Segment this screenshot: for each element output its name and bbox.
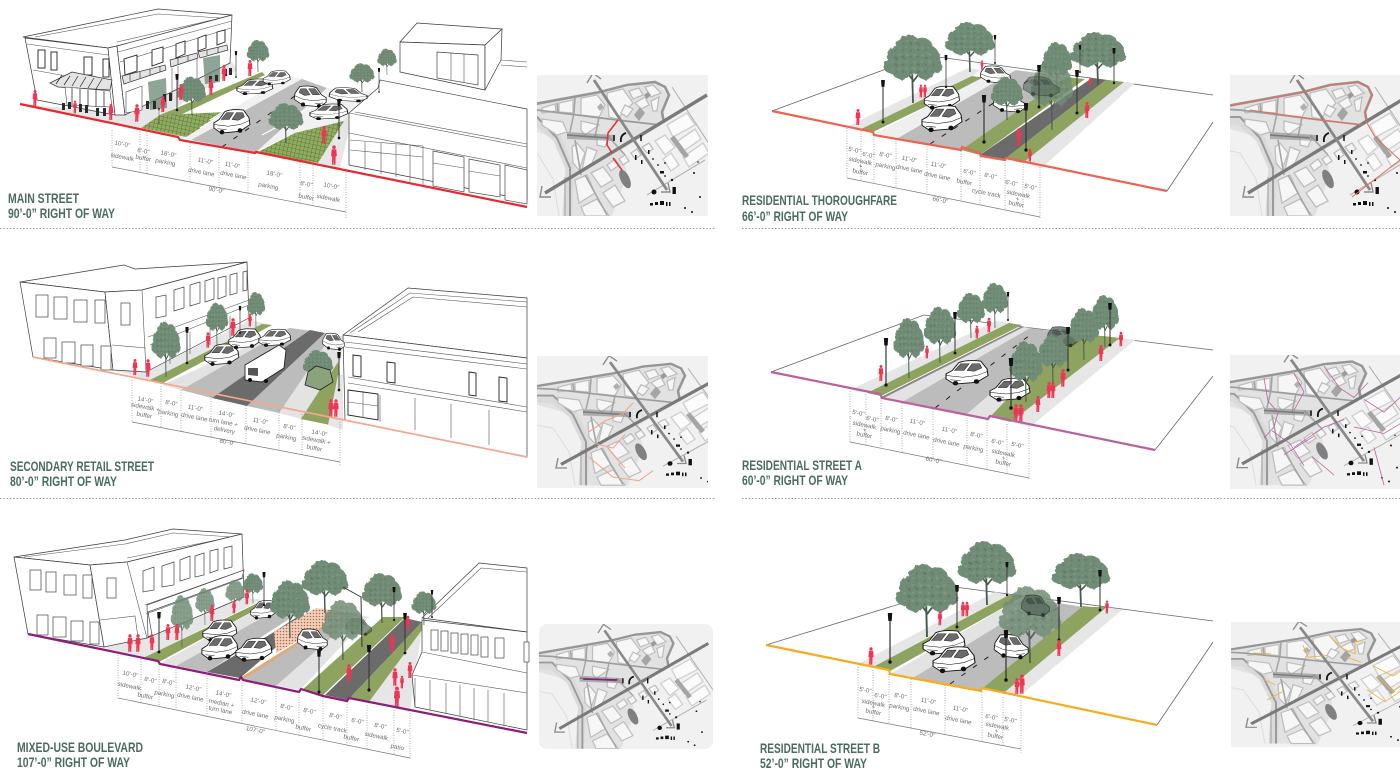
title: residential street a: 60’-0” RIGHT OF WAY xyxy=(742,472,848,488)
panel: mixed-use boulevard xyxy=(14,529,716,770)
dimension labels: 8'-0" xyxy=(879,151,892,160)
dimension labels: cycle track xyxy=(317,722,348,735)
dimension labels: 6'-0" xyxy=(985,713,998,722)
dimension labels: 11'-0" xyxy=(909,418,925,427)
pedestrians xyxy=(868,601,1109,694)
dimension labels: buffer xyxy=(298,193,315,202)
dimension labels: drive lane xyxy=(895,163,924,176)
dimension labels: buffer xyxy=(956,178,973,188)
trees xyxy=(896,541,1110,637)
dimension labels: 11'-0" xyxy=(224,161,240,170)
dimension labels: 18'-0" xyxy=(160,150,177,159)
title: secondary retail street: 80’-0” RIGHT OF WAY xyxy=(10,473,117,489)
divider: row two left xyxy=(0,498,716,500)
dimension labels: sidewalk + xyxy=(301,434,332,447)
locator map: residential thoroughfare xyxy=(1230,75,1400,216)
street surfaces xyxy=(104,597,422,712)
dimension labels: buffer xyxy=(856,431,873,441)
street lamps xyxy=(185,306,341,391)
dimension labels: sidewalk xyxy=(848,156,874,168)
dimension labels: 10'-0" xyxy=(122,670,139,680)
dimension labels: + xyxy=(871,704,876,711)
cars xyxy=(923,631,1028,673)
street surfaces xyxy=(848,67,1135,168)
title: residential thoroughfare: RESIDENTIAL THOROUGHFARE xyxy=(742,192,897,208)
ground plane xyxy=(771,315,1213,450)
dimension labels: parking xyxy=(276,432,297,443)
dimension labels: 5'-0" xyxy=(1024,183,1037,192)
locator map: residential street b xyxy=(1231,622,1400,747)
dimension labels: 6'-0" xyxy=(1005,179,1018,188)
street lamps xyxy=(888,562,1102,682)
trees xyxy=(178,40,397,143)
dimension labels: sidewalk xyxy=(316,193,341,204)
dimension labels xyxy=(117,655,410,759)
street lamps xyxy=(884,292,1112,410)
dimension labels: 6'-0" xyxy=(862,151,875,160)
dimension labels: + xyxy=(994,728,999,735)
dimension labels: 8'-0" xyxy=(144,676,157,685)
right of way line xyxy=(772,111,1167,191)
dimension labels: 6'-0" xyxy=(874,692,887,701)
dimension labels xyxy=(858,667,1021,753)
building: opposite block xyxy=(349,23,527,204)
dimension labels: buffer xyxy=(865,708,882,717)
dimension labels: 8'-0" xyxy=(283,423,296,432)
dimension labels: 6'-0" xyxy=(351,717,364,726)
panel: residential street a xyxy=(742,283,1400,489)
dimension labels: 6'-0" xyxy=(991,438,1004,447)
dimension labels: drive lane xyxy=(176,691,205,704)
dimension labels: 11'-0" xyxy=(252,417,268,426)
dimension labels: parking xyxy=(154,689,175,700)
dimension labels: 8'-0" xyxy=(894,692,907,701)
building: corner mixed-use block xyxy=(14,529,244,647)
dimension labels: 90'-0" xyxy=(208,186,225,195)
dimension labels: drive lane xyxy=(219,170,248,182)
cars xyxy=(922,66,1025,132)
divider: row one right xyxy=(742,228,1400,230)
right of way line xyxy=(766,645,1157,725)
dimension labels: parking xyxy=(155,157,176,168)
street lamps xyxy=(881,35,1116,152)
trees xyxy=(171,560,436,647)
dimension labels: 11'-0" xyxy=(941,426,957,435)
title: mixed-use boulevard: MIXED-USE BOULEVARD xyxy=(17,739,143,755)
dimension labels: 10'-0" xyxy=(323,182,340,191)
right of way line xyxy=(28,634,527,733)
title: main street: MAIN STREET xyxy=(8,190,79,206)
dimension labels: 8'-0" xyxy=(280,703,293,712)
divider: row two right xyxy=(742,498,1400,500)
dimension labels: median + xyxy=(208,698,235,710)
right of way line xyxy=(20,104,527,207)
dimension labels: 14'-0" xyxy=(215,690,232,700)
dimension labels: sidewalk xyxy=(1006,189,1032,201)
dimension labels: parking xyxy=(875,161,896,172)
locator map: mixed-use boulevard xyxy=(539,624,713,749)
dimension labels: 6'-0" xyxy=(963,168,976,177)
dimension labels: 5'-0" xyxy=(396,727,409,736)
title: residential street b: 52’-0” RIGHT OF WAY xyxy=(760,755,867,771)
dimension labels: buffer xyxy=(136,411,153,420)
dimension labels: 5'-0" xyxy=(859,686,872,695)
title: residential street a: RESIDENTIAL STREET A xyxy=(742,457,862,473)
dimension labels: sidewalk xyxy=(110,152,135,163)
dimension labels: parking xyxy=(889,702,910,713)
pedestrians xyxy=(133,314,339,417)
locator map: main street xyxy=(537,75,708,216)
dimension labels: sidewalk + xyxy=(130,401,161,414)
building: corner retail block xyxy=(20,262,249,372)
dimension labels: turn lane + xyxy=(208,416,239,429)
pedestrians xyxy=(127,590,412,707)
trees xyxy=(151,292,333,387)
dimension labels: 11'-0" xyxy=(930,161,946,170)
building: opposite block xyxy=(343,288,527,457)
dimension labels: 8'-0" xyxy=(374,722,387,731)
dimension labels: sidewalk xyxy=(852,420,878,432)
dimension labels: + xyxy=(862,427,867,434)
dimension labels: buffer xyxy=(343,734,360,744)
panel: main street xyxy=(8,9,715,221)
dimension labels: cycle track xyxy=(971,187,1002,200)
dimension labels: + xyxy=(858,163,863,170)
dimension labels: 11'-0" xyxy=(187,404,203,413)
dimension labels: parking xyxy=(963,443,984,454)
cars xyxy=(214,71,367,134)
dimension labels: 14'-0" xyxy=(137,396,154,405)
dimension labels: drive lane xyxy=(923,170,952,183)
dimension labels: 5'-0" xyxy=(852,409,865,418)
ground plane xyxy=(772,55,1213,191)
street surfaces xyxy=(858,592,1122,695)
dimension labels: 14'-0" xyxy=(218,410,235,419)
locator map: residential street a xyxy=(1230,355,1400,489)
dimension labels: drive lane xyxy=(902,429,931,442)
trees xyxy=(893,283,1119,402)
dimension labels: drive lane xyxy=(187,167,216,179)
pedestrians and cafe seating xyxy=(33,60,337,165)
dimension labels xyxy=(110,129,346,218)
dimension labels: 12'-0" xyxy=(250,697,267,707)
dimension labels: 11'-0" xyxy=(197,157,213,166)
dimension labels: drive lane xyxy=(241,708,270,721)
dimension labels: buffer xyxy=(995,459,1012,469)
dimension labels: parking xyxy=(158,408,179,419)
title: mixed-use boulevard: 107’-0” RIGHT OF WAY xyxy=(17,754,130,770)
dimension labels: 8'-0" xyxy=(162,678,175,687)
pedestrians xyxy=(879,318,1123,422)
dimension labels: 107'-0" xyxy=(245,725,265,736)
dimension labels: parking xyxy=(258,181,279,192)
foreground tree xyxy=(999,586,1061,663)
locator map: secondary retail street xyxy=(537,356,708,488)
dimension labels: drive lane xyxy=(912,706,941,718)
dimension labels: 52'-0" xyxy=(919,730,936,739)
dimension labels: buffer xyxy=(306,444,323,453)
ground plane xyxy=(766,587,1213,725)
street surfaces xyxy=(20,62,372,168)
dimension labels: 11'-0" xyxy=(952,705,968,714)
dimension labels xyxy=(847,128,1040,219)
dimension labels: drive lane xyxy=(180,412,209,424)
translucent car behind trees xyxy=(1023,77,1059,97)
cars xyxy=(946,327,1077,402)
panel: residential street b xyxy=(760,541,1400,771)
right of way line xyxy=(33,357,527,457)
truck and cars xyxy=(205,329,344,383)
dimension labels: 11'-0" xyxy=(901,155,917,164)
dimension labels: buffer xyxy=(137,692,154,702)
dimension labels: sidewalk xyxy=(985,721,1010,732)
dimension labels: sidewalk xyxy=(991,448,1017,460)
dimension labels: 10'-0" xyxy=(114,140,131,149)
cars xyxy=(202,600,371,662)
street lamps xyxy=(158,51,380,139)
dimension labels: buffer xyxy=(852,168,869,178)
building: opposite block xyxy=(412,563,529,730)
dimension labels: 80'-0" xyxy=(219,438,236,447)
dimension labels: 11'-0" xyxy=(920,697,936,706)
dimension labels: delivery xyxy=(213,425,236,436)
dimension labels: patio xyxy=(390,743,405,752)
dimension labels: 6'-0" xyxy=(137,147,150,156)
dimension labels: drive lane xyxy=(944,715,973,727)
dimension labels: 8'-0" xyxy=(300,180,313,189)
title: main street: 90’-0” RIGHT OF WAY xyxy=(8,205,115,221)
title: residential street b: RESIDENTIAL STREET B xyxy=(760,740,880,756)
dimension labels: sidewalk xyxy=(117,681,143,693)
dimension labels: 8'-0" xyxy=(970,431,983,440)
dimension labels: buffer xyxy=(987,732,1004,741)
dimension labels: 6'-0" xyxy=(866,415,879,424)
trees xyxy=(884,22,1126,130)
dimension labels: 8'-0" xyxy=(165,399,178,408)
dimension labels: 12'-0" xyxy=(185,684,202,694)
divider: row one left xyxy=(0,228,716,230)
dimension labels: 8'-0" xyxy=(329,712,342,721)
dimension labels: 60'-0" xyxy=(925,456,942,466)
dimension labels: buffer xyxy=(135,154,152,163)
dimension labels xyxy=(130,380,340,466)
title: residential street a xyxy=(742,457,862,488)
dimension labels: drive lane xyxy=(243,425,272,437)
dimension labels: 8'-0" xyxy=(984,172,997,181)
foreground tree xyxy=(322,600,364,660)
dimension labels: sidewalk xyxy=(861,698,886,709)
dimension labels: 8'-0" xyxy=(885,415,898,424)
title: residential thoroughfare: 66’-0” RIGHT OF WAY xyxy=(742,208,848,224)
dimension labels xyxy=(850,391,1029,480)
dimension labels: 5'-0" xyxy=(1011,441,1024,450)
dimension labels: 14'-0" xyxy=(311,429,328,438)
title: residential street b xyxy=(760,740,880,771)
dimension labels: turn lane xyxy=(208,705,233,716)
title: main street xyxy=(8,190,115,221)
title: secondary retail street: SECONDARY RETAIL STREET xyxy=(10,458,154,474)
dimension labels: + xyxy=(1015,196,1020,203)
dimension labels: 5'-0" xyxy=(848,146,861,155)
dimension labels: + xyxy=(1001,455,1006,462)
translucent car behind tree xyxy=(1021,595,1049,617)
dimension labels: parking xyxy=(274,714,295,725)
street surfaces xyxy=(113,320,345,430)
dimension labels: 18'-0" xyxy=(266,170,283,179)
title: residential thoroughfare xyxy=(742,192,897,224)
dimension labels: buffer xyxy=(1008,200,1025,210)
title: mixed-use boulevard xyxy=(17,739,143,770)
dimension labels: 66'-0" xyxy=(932,196,949,206)
dimension labels: sidewalk xyxy=(364,731,390,743)
dimension labels: 5'-0" xyxy=(1004,716,1017,725)
dimension labels: parking xyxy=(880,425,901,436)
street lamps xyxy=(157,572,433,693)
building: corner retail block xyxy=(23,9,232,115)
street planters xyxy=(148,55,220,110)
dimension labels: buffer xyxy=(295,724,312,734)
panel: secondary retail street xyxy=(10,262,731,489)
street surfaces xyxy=(850,321,1135,427)
green car xyxy=(305,366,333,390)
right of way line xyxy=(771,372,1155,450)
dimension labels: 8'-0" xyxy=(303,707,316,716)
dimension labels: drive lane xyxy=(932,436,961,449)
pedestrians xyxy=(856,60,1091,161)
title: secondary retail street xyxy=(10,458,154,489)
panel: residential thoroughfare xyxy=(742,22,1400,224)
